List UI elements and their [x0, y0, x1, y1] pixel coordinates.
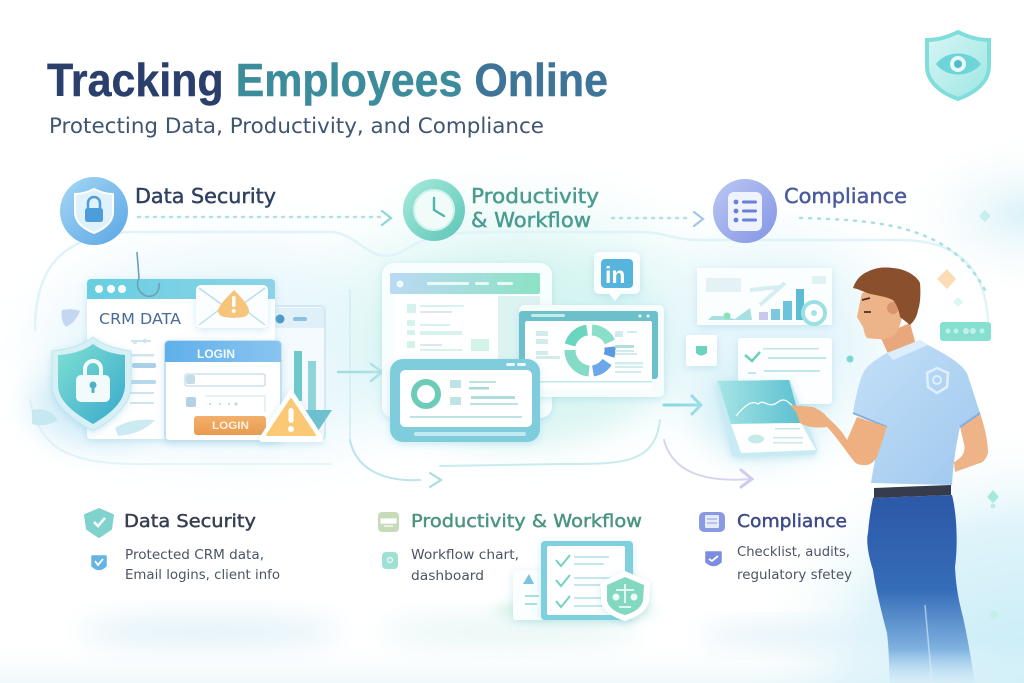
icon: email warning	[196, 285, 268, 328]
arrow: lower teal sweep	[430, 473, 441, 487]
bottom window	[390, 359, 540, 442]
chart card	[697, 268, 832, 325]
arrow: step 2 to step 3	[664, 396, 701, 414]
main window	[382, 263, 552, 418]
title: Tracking Employees Online	[47, 54, 608, 106]
tablet	[716, 380, 817, 457]
panel: productivity illustration	[370, 252, 670, 445]
info block: data security	[85, 509, 280, 583]
step 1 header: Data Security: Data Security	[135, 184, 276, 208]
icon: warning triangle	[260, 390, 322, 441]
step 1 header: Data Security	[60, 177, 391, 245]
info block: compliance	[699, 512, 852, 583]
icon: note	[378, 512, 399, 532]
step 2 header: Productivity & Workflow: Productivity	[471, 184, 599, 208]
step 3 header: Compliance: Compliance	[784, 184, 907, 208]
decorative dots and chips at right	[846, 210, 999, 619]
icon: shirt shield logo	[927, 368, 948, 393]
flow frame lines	[30, 232, 988, 480]
arrow: step 1 to step 2	[338, 364, 382, 381]
CRM window: CRM DATA	[99, 310, 182, 328]
login panel: LOGIN	[212, 420, 249, 432]
icon: lock circle	[60, 177, 128, 245]
step 2 header: Productivity & Workflow	[403, 179, 703, 241]
info block: productivity and workflow	[378, 512, 655, 622]
panel: data security illustration	[30, 252, 332, 447]
icon: teal shield check	[85, 509, 113, 537]
icon: linkedin bubble	[594, 252, 640, 301]
head	[857, 285, 903, 339]
icon: shield with padlock	[52, 337, 131, 431]
decorative leaf	[62, 309, 80, 327]
dashboard window	[519, 305, 664, 397]
back arm	[954, 413, 988, 472]
icon: linkedin bubble: in	[605, 262, 625, 288]
CRM window	[87, 279, 275, 439]
person looking at tablet	[790, 267, 988, 683]
icon: shield with eye logo	[927, 32, 989, 99]
info block: data security: Email logins, client info	[125, 568, 280, 583]
arrow: lower purple sweep	[741, 470, 752, 487]
pants	[867, 495, 975, 683]
icon: clock circle	[403, 179, 465, 241]
panel: compliance illustration	[686, 268, 832, 460]
info block: productivity and workflow: Productivity & Workflow	[411, 512, 642, 532]
login panel: LOGIN	[197, 349, 235, 361]
info block: data security: Data Security	[124, 512, 256, 532]
shirt	[853, 340, 980, 485]
info block: compliance: Compliance	[737, 512, 847, 532]
icon: purple check	[706, 552, 721, 566]
step 3 header: Compliance	[713, 179, 985, 290]
shield card	[686, 335, 717, 366]
checklist with balance shield	[495, 541, 655, 622]
belt	[874, 485, 951, 498]
secondary window	[262, 306, 332, 440]
step 2 header: Productivity & Workflow: & Workflow	[471, 208, 591, 232]
icon: phishing hook	[137, 252, 159, 296]
front arm and hand	[790, 405, 887, 465]
icon: document	[699, 512, 725, 532]
icon: checklist circle	[713, 179, 777, 243]
info block: productivity and workflow: Workflow chart,	[411, 548, 519, 563]
info block: compliance: regulatory sfetey	[737, 568, 852, 583]
hair	[853, 267, 920, 325]
neck	[880, 323, 916, 358]
icon: small teal chip	[382, 552, 398, 569]
checklist card	[738, 338, 832, 404]
icon: blue check	[92, 556, 106, 570]
login panel	[165, 341, 281, 441]
info block: data security: Protected CRM data,	[125, 548, 264, 563]
info block: compliance: Checklist, audits,	[737, 545, 850, 560]
subtitle: Protecting Data, Productivity, and Compliance	[49, 114, 544, 138]
info block: productivity and workflow: dashboard	[411, 569, 484, 584]
